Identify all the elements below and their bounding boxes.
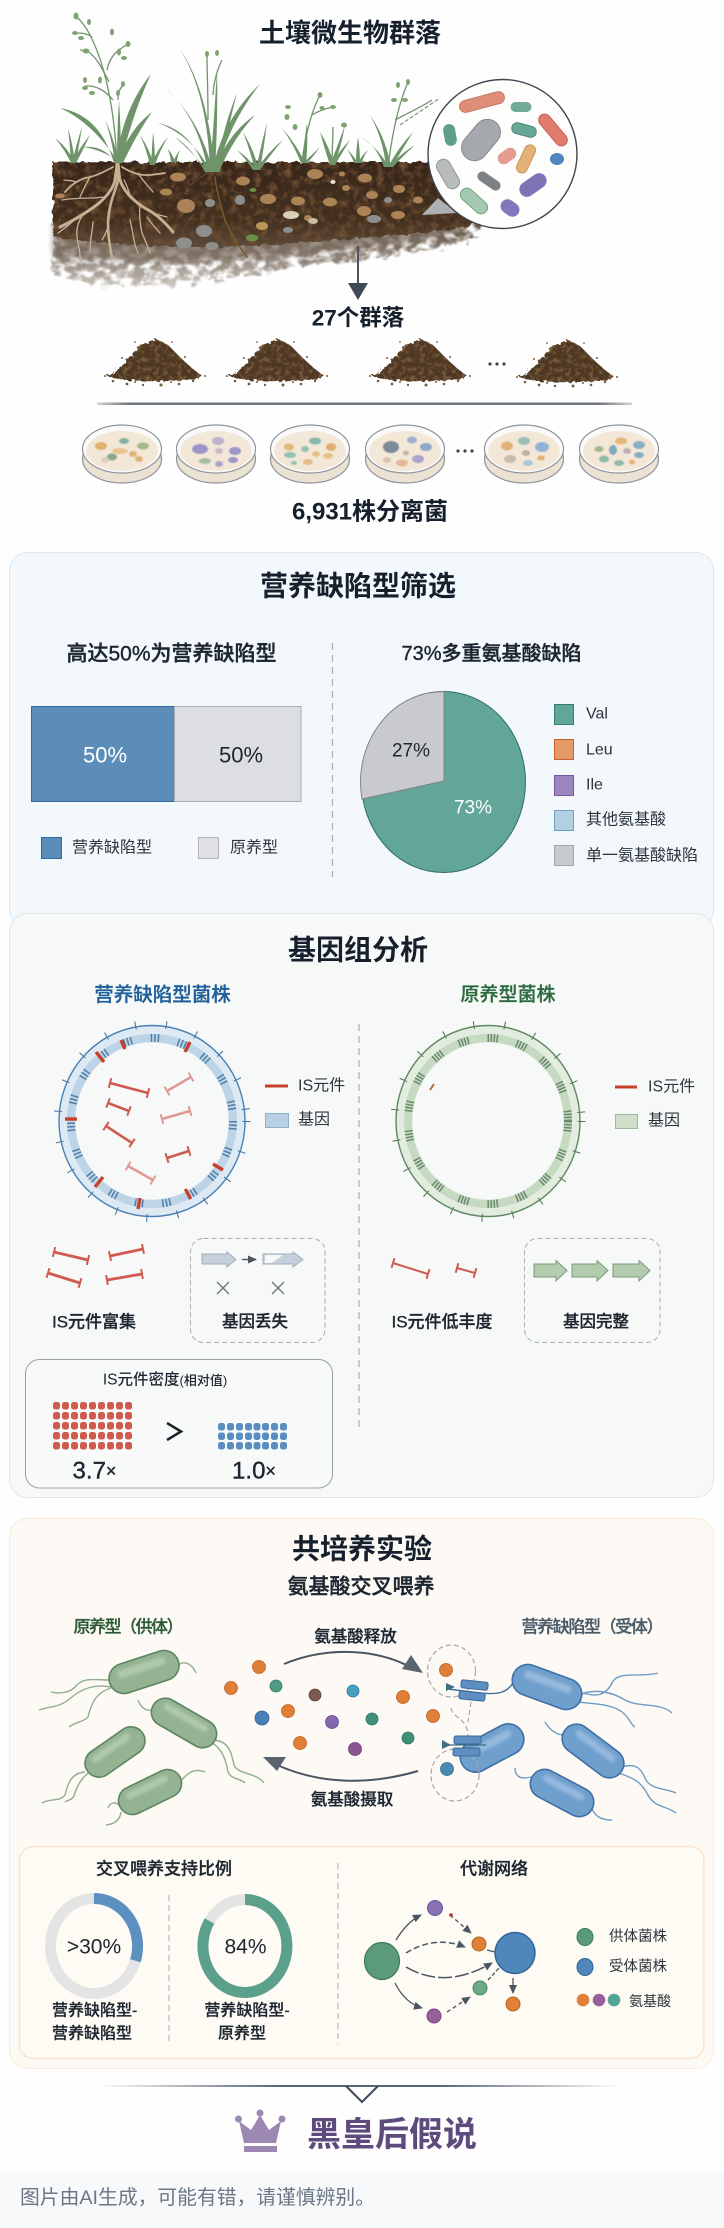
pie chart — [361, 692, 526, 872]
title: 土壤微生物群落 — [259, 18, 441, 48]
heading: genome: 基因组分析 — [288, 934, 428, 966]
recipient bacteria group — [455, 1660, 676, 1822]
value 1.0x: 1.0× — [232, 1458, 276, 1484]
network legend: 供体菌株 — [609, 1928, 667, 1945]
pie legend: 其他氨基酸 — [586, 810, 666, 828]
ring legend: auxotroph — [265, 1076, 345, 1128]
panel: auxotroph screening — [10, 552, 714, 928]
heading: screening: 营养缺陷型筛选 — [260, 570, 456, 602]
recipient bacterium — [556, 1718, 630, 1784]
bar legend: 原养型 — [230, 838, 278, 856]
soil samples — [104, 339, 618, 388]
gene loss box — [190, 1238, 325, 1342]
panel: co-culture — [10, 1518, 714, 2068]
label: IS enrichment: IS元件富集 — [52, 1312, 136, 1332]
connector to conclusion — [97, 2085, 621, 2102]
donut label 1: 营养缺陷型 — [52, 2024, 132, 2042]
dividers — [169, 1863, 338, 2044]
arrow: down to communities — [348, 246, 368, 300]
label: amino acid uptake: 氨基酸摄取 — [311, 1790, 394, 1809]
ring legend: prototroph — [615, 1078, 695, 1130]
conclusion: Black Queen hypothesis — [235, 2110, 477, 2154]
donut label 1: 营养缺陷型- — [52, 2002, 137, 2020]
stacked bar chart: 50% — [219, 742, 263, 768]
donut chart: >30%: >30% — [67, 1936, 121, 1958]
red dot matrix — [53, 1402, 132, 1450]
subheading: up to 50%: 高达50%为营养缺陷型 — [66, 642, 277, 666]
transporter channels — [428, 1645, 513, 1801]
petri dish 4 — [366, 425, 444, 483]
donut label 2 — [204, 2002, 290, 2042]
donut chart: 84%: 84% — [224, 1936, 267, 1958]
donor bacteria group — [39, 1647, 264, 1825]
network legend: 氨基酸 — [629, 1993, 671, 2009]
ring legend: prototroph: 基因 — [648, 1112, 680, 1130]
magnifier: microbes — [400, 80, 577, 228]
recipient bacterium — [508, 1660, 586, 1714]
divider — [332, 643, 334, 877]
ring legend: prototroph: IS元件 — [648, 1078, 695, 1096]
petri dishes — [82, 425, 658, 483]
value 3.7x: 3.7× — [73, 1458, 116, 1484]
ring legend: auxotroph: 基因 — [298, 1110, 330, 1128]
amino acid particles — [224, 1660, 454, 1776]
footer disclaimer: 图片由AI生成，可能有错，请谨慎辨别。 — [20, 2187, 375, 2209]
label: IS low abundance: IS元件低丰度 — [391, 1312, 493, 1332]
donor bacterium — [105, 1647, 183, 1697]
label: donor: 原养型（供体） — [74, 1618, 184, 1636]
IS enrichment icons — [48, 1249, 143, 1283]
donut chart: >30% — [50, 1898, 138, 1994]
bar legend: 营养缺陷型 — [72, 838, 152, 856]
pie legend — [554, 704, 698, 866]
donor bacterium — [80, 1721, 150, 1783]
gene loss box: 基因丢失 — [222, 1312, 288, 1331]
arrow: release — [284, 1652, 423, 1673]
donut label 2: 营养缺陷型- — [204, 2002, 290, 2020]
panel: soil microbial community — [53, 12, 577, 286]
petri dish ellipsis — [456, 449, 474, 453]
plant seed stems — [75, 15, 432, 167]
petri dish 2 — [176, 425, 256, 483]
pie chart: 27% — [392, 740, 430, 762]
inner panel: results — [20, 1846, 704, 2058]
petri dish 6 — [580, 425, 658, 483]
footer — [0, 2172, 724, 2228]
panel: genome analysis — [10, 914, 714, 1498]
subheading: 73%: 73%多重氨基酸缺陷 — [401, 642, 582, 665]
illustration: soil cross section — [53, 12, 484, 286]
blue dot matrix — [218, 1423, 287, 1450]
IS density box — [26, 1360, 332, 1488]
plants — [55, 49, 415, 172]
donut label 1 — [52, 2002, 137, 2042]
pie chart: 73% — [454, 798, 492, 818]
IS low abundance icons — [393, 1263, 475, 1274]
gene intact box — [524, 1238, 660, 1342]
donut label 2: 原养型 — [218, 2024, 266, 2042]
stacked bar chart — [32, 706, 301, 802]
icon: crown — [235, 2110, 286, 2152]
divider line — [97, 402, 632, 405]
network legend: 受体菌株 — [609, 1958, 667, 1975]
arrow: uptake — [263, 1757, 418, 1781]
donor bacterium — [146, 1693, 222, 1753]
heading: support ratio: 交叉喂养支持比例 — [96, 1858, 232, 1878]
petri dish 3 — [270, 425, 350, 483]
heading: hypothesis: 黑皇后假说 — [307, 2116, 477, 2154]
pie legend: Leu — [586, 742, 613, 758]
network legend — [577, 1928, 671, 2009]
divider — [358, 1024, 360, 1431]
recipient bacterium — [525, 1764, 599, 1822]
donor bacterium — [114, 1765, 186, 1819]
recipient bacterium — [455, 1718, 529, 1778]
donut chart: 84% — [203, 1900, 287, 1992]
ring legend: auxotroph: IS元件 — [298, 1076, 345, 1094]
petri dish 1 — [82, 425, 162, 483]
label: amino acid release: 氨基酸释放 — [314, 1627, 397, 1646]
petri dish 5 — [484, 425, 564, 483]
IS elements inside ring — [106, 1077, 191, 1180]
gene intact box: 基因完整 — [563, 1311, 629, 1331]
IS density title: IS元件密度(相对值) — [103, 1370, 227, 1388]
genome ring: prototroph — [394, 1024, 582, 1218]
label: 27 communities: 27个群落 — [312, 306, 405, 330]
label: recipient: 营养缺陷型（受体） — [522, 1618, 664, 1636]
heading: prototroph strain: 原养型菌株 — [460, 984, 556, 1006]
greater-than sign — [167, 1423, 181, 1440]
subheading: cross-feeding: 氨基酸交叉喂养 — [288, 1576, 434, 1598]
bar legend — [42, 838, 278, 858]
soil pebbles — [55, 169, 423, 250]
genome ring: auxotroph — [58, 1024, 246, 1218]
pie legend: Ile — [586, 776, 603, 794]
label: 6,931 isolates: 6,931株分离菌 — [292, 498, 448, 526]
heading: co-culture: 共培养实验 — [292, 1534, 432, 1564]
pie legend: 单一氨基酸缺陷 — [586, 846, 698, 864]
stacked bar chart: 50% — [83, 742, 127, 768]
pie legend: Val — [586, 706, 608, 722]
heading: auxotroph strain: 营养缺陷型菌株 — [94, 984, 231, 1006]
plant roots — [58, 163, 247, 257]
metabolic network — [364, 1900, 535, 2023]
heading: metabolic network: 代谢网络 — [460, 1858, 528, 1878]
